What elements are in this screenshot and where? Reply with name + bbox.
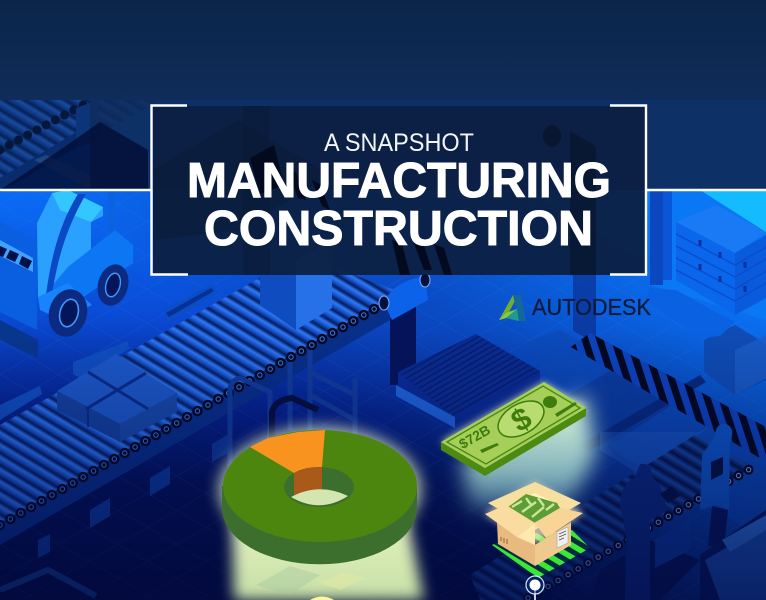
box mark	[501, 537, 507, 544]
front flaps	[485, 505, 535, 537]
subtitle: A SNAPSHOT	[324, 129, 474, 157]
cash pile	[508, 494, 560, 523]
conveyor glow	[492, 530, 590, 578]
logo mark	[499, 295, 526, 321]
gate frame and lifting machine	[230, 350, 355, 470]
left face	[497, 522, 535, 566]
value label: $72B	[456, 421, 493, 452]
logo wordmark: AUTODESK	[532, 294, 652, 320]
donut hole	[284, 467, 354, 507]
dollar bill $72B	[441, 382, 586, 476]
right face	[535, 522, 571, 566]
upper-left conveyor	[0, 50, 160, 192]
cardboard box of cash	[485, 482, 590, 578]
orange segment	[250, 430, 325, 473]
depth shading	[0, 330, 766, 600]
main conveyor belt	[0, 255, 400, 558]
glow beneath money	[441, 382, 596, 510]
light beam below donut	[232, 520, 424, 600]
dollar sign: $	[505, 400, 537, 439]
donut side	[222, 486, 417, 564]
hazard stripes	[571, 333, 766, 458]
forklift	[0, 190, 133, 358]
frame lines and brackets	[0, 106, 766, 274]
upper dark overlay	[0, 100, 766, 190]
worker with clipboard	[700, 424, 732, 548]
donut chart	[218, 426, 422, 564]
back flaps	[488, 482, 581, 530]
shipping label	[557, 527, 568, 548]
pallet stack	[396, 334, 540, 436]
centre worker	[379, 273, 430, 385]
boxes on conveyor	[57, 240, 332, 442]
worker in hardhat	[620, 464, 680, 600]
green segment	[223, 430, 417, 542]
flap glow	[485, 482, 583, 545]
seal	[492, 394, 550, 444]
title line 1: MANUFACTURING	[187, 154, 611, 208]
title panel	[153, 106, 646, 275]
hazard stripes behind title	[250, 145, 452, 275]
bottom conveyor belt	[470, 435, 766, 600]
top band	[0, 0, 766, 100]
foreground crates	[705, 515, 766, 600]
right wall and brick stack	[645, 190, 766, 395]
title line 2: CONSTRUCTION	[204, 202, 593, 256]
Autodesk logo	[499, 294, 652, 321]
floor outline	[0, 570, 96, 596]
timeline pin	[526, 576, 544, 600]
light through hole	[291, 489, 348, 505]
back wall platform	[520, 275, 766, 540]
